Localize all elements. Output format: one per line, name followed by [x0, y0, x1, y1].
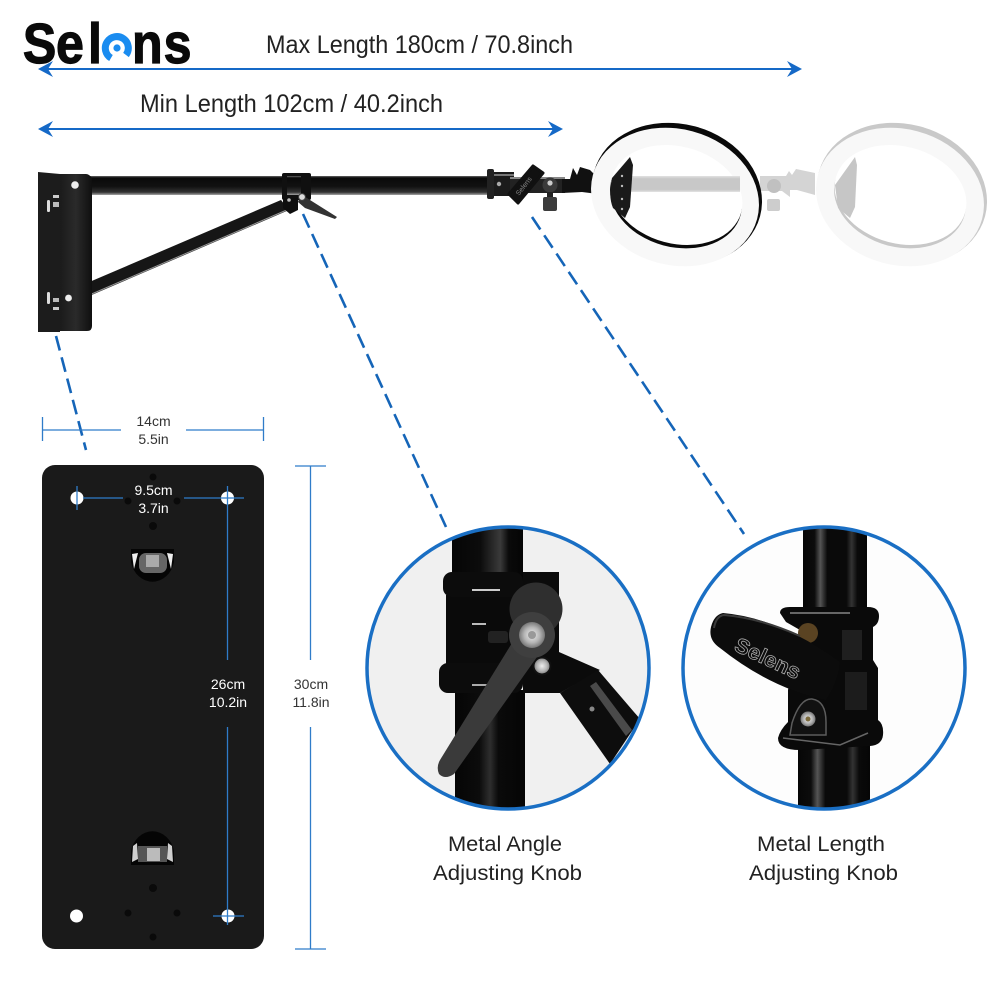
caption: length knob: Metal Length: [757, 833, 885, 856]
detail circle: length knob: [683, 525, 965, 820]
max length label: Max Length 180cm / 70.8inch: [266, 31, 573, 59]
arrow: max length: [38, 61, 802, 77]
dimension: plate width 14cm: [42, 413, 264, 447]
ring clamp: [562, 167, 598, 194]
wall plate front: [60, 174, 92, 331]
collar body: [446, 595, 513, 664]
knob body: [710, 613, 810, 688]
angle knob lever: [298, 194, 337, 219]
mounting holes: [70, 492, 234, 922]
dimension: plate width 14cm: 14cm: [136, 413, 171, 429]
wall mount arm: [38, 166, 598, 332]
brass screw: [798, 623, 818, 643]
length clamp: [487, 169, 565, 199]
ball head: [542, 178, 558, 211]
lever bolt: [519, 622, 545, 648]
small bolt: [534, 658, 550, 674]
ghost tube behind ring: [630, 176, 740, 192]
caption: angle knob: Adjusting Knob: [433, 862, 582, 885]
min length label: Min Length 102cm / 40.2inch: [140, 90, 443, 118]
length knob: [509, 166, 543, 203]
caption: length knob: [749, 833, 898, 885]
arrow: min length: [38, 121, 563, 137]
dimension: plate height 30cm: 11.8in: [292, 694, 330, 710]
knob lettering: Selens: [731, 634, 804, 684]
bottom keyhole slot: [131, 831, 174, 865]
top keyhole slot: [131, 549, 174, 582]
vertical tube: [452, 528, 523, 581]
diagonal brace: [87, 200, 289, 297]
hole height label: 26cm: [211, 676, 245, 692]
ring light: compact position: [575, 104, 778, 285]
ghost ring light: extended position: [760, 104, 1000, 285]
small holes: [124, 474, 180, 940]
dimension: plate height 30cm: [292, 466, 330, 949]
clamp tab: [790, 699, 826, 735]
brace tube: [560, 670, 640, 764]
hole width label: 3.7in: [138, 500, 169, 516]
bracket: [523, 572, 600, 693]
caption: angle knob: [433, 833, 582, 885]
dashed connectors: [56, 214, 744, 534]
ring phone holder: [610, 157, 633, 218]
hole width label: 9.5cm: [134, 482, 173, 498]
hole height label: 10.2in: [209, 694, 247, 710]
main tube: [88, 176, 490, 195]
logo: Selens: Selens: [23, 12, 192, 76]
detail circle: angle knob: [367, 525, 649, 815]
hole height label: [209, 676, 247, 710]
clamp body: [778, 607, 883, 750]
wall plate back: [38, 172, 60, 332]
lever head: [510, 582, 562, 628]
hole width label: [134, 482, 173, 516]
dimension: plate height 30cm: 30cm: [294, 676, 328, 692]
vertical tube: [803, 525, 867, 610]
collar: [282, 173, 311, 214]
hole spacing lines: [77, 486, 244, 925]
lever arm: [438, 643, 537, 777]
caption: length knob: Adjusting Knob: [749, 862, 898, 885]
mounting plate: [42, 465, 264, 949]
plate mounting details: [47, 181, 79, 310]
length knob: Selens: [515, 176, 534, 197]
dimension: plate width 14cm: 5.5in: [138, 431, 169, 447]
caption: angle knob: Metal Angle: [448, 833, 562, 856]
